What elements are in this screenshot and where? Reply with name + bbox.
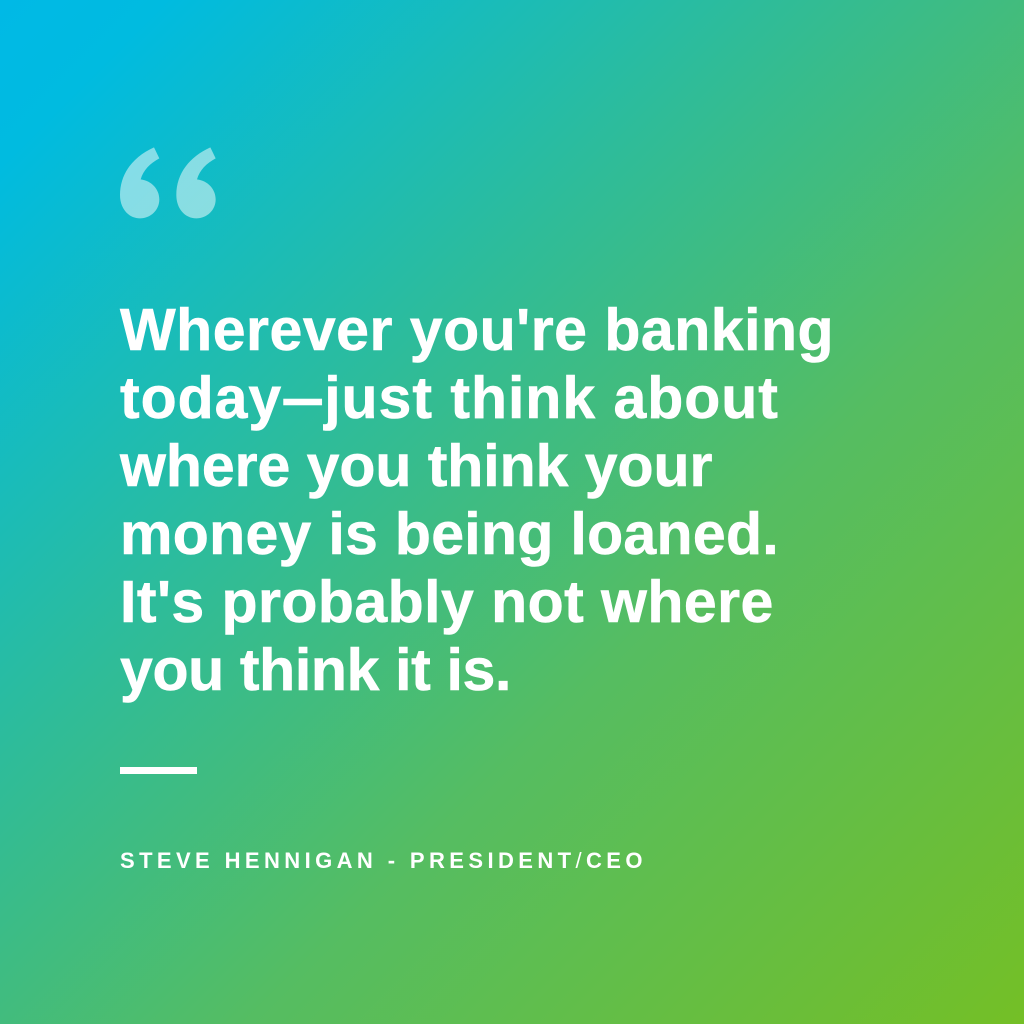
quote text	[120, 297, 834, 703]
quote text: It's probably not where	[120, 569, 774, 635]
icon: opening quotation mark	[120, 147, 216, 218]
quote text: where you think your	[120, 433, 712, 499]
quote text: money is being loaned.	[120, 501, 779, 567]
quote text: you think it is.	[120, 637, 511, 703]
quote text: Wherever you're banking	[120, 297, 834, 363]
divider line	[120, 767, 197, 774]
attribution: STEVE HENNIGAN - PRESIDENT/CEO	[120, 848, 647, 873]
quote text: today just think about	[120, 365, 779, 431]
quote text: —	[284, 365, 323, 431]
